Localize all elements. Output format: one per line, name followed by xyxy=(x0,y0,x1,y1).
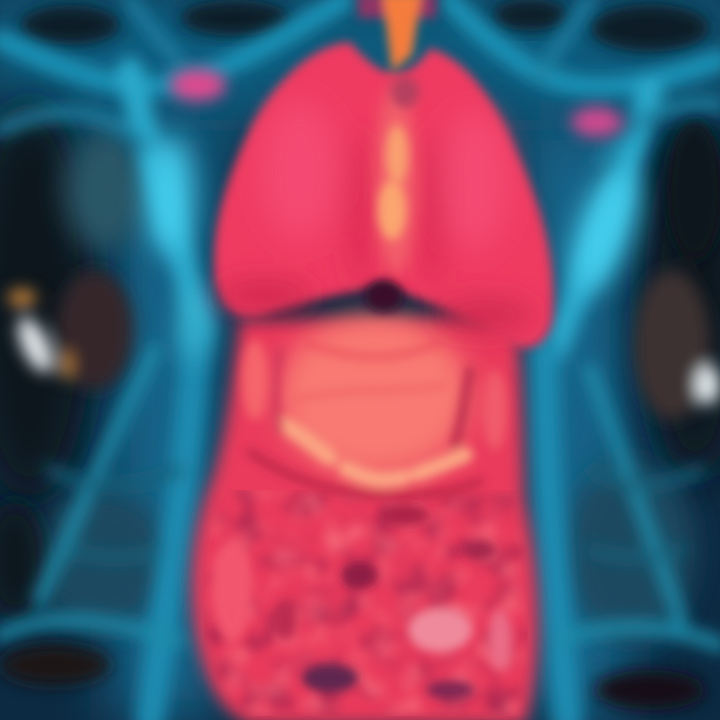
stomach folds xyxy=(250,338,480,496)
small pink nodes xyxy=(170,69,623,137)
intestine dark mottling xyxy=(204,490,527,716)
left lung xyxy=(214,42,395,317)
central airway xyxy=(376,76,419,275)
side detail: left machinery xyxy=(0,270,133,685)
upper stomach xyxy=(279,315,471,475)
digestive tract xyxy=(192,315,538,720)
intestine spots xyxy=(212,340,512,699)
lung shading xyxy=(215,100,535,331)
bright cyan highlights xyxy=(148,135,652,360)
right lung xyxy=(385,48,553,347)
dark opening xyxy=(365,280,403,312)
lower intestine mass xyxy=(192,320,538,720)
trachea xyxy=(358,0,436,72)
intestine light mottling xyxy=(204,490,527,716)
side detail: right machinery xyxy=(595,120,720,710)
